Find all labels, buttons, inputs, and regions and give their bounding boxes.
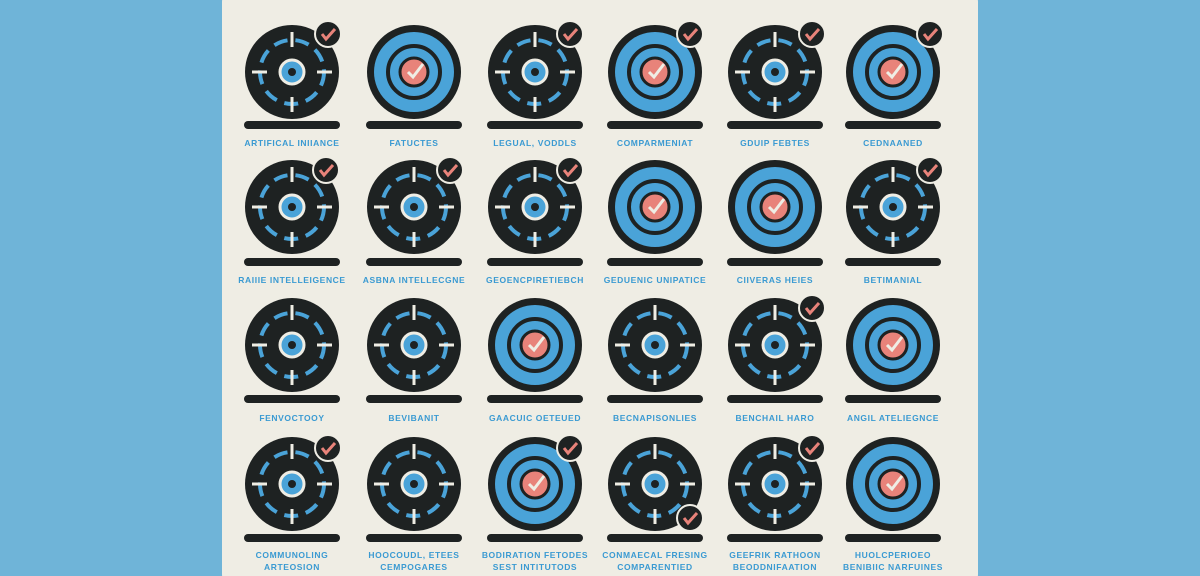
- row 1 labels: GDUIP FEBTES: [740, 138, 810, 148]
- row 2 labels: CIIVERAS HEIES: [737, 275, 813, 285]
- row 1 labels: ARTIFICAL INIIANCE: [244, 138, 340, 148]
- row 4 labels: BODIRATION FETODES: [482, 550, 588, 560]
- row 4 labels: COMMUNOLING: [256, 550, 328, 560]
- row 1 labels: FATUCTES: [389, 138, 439, 148]
- row 2 icons: [245, 157, 943, 254]
- row 3 bars: [244, 395, 941, 403]
- row 2 bars: [244, 258, 941, 266]
- row 4 labels: COMPARENTIED: [617, 562, 693, 572]
- row 3 labels: BENCHAIL HARO: [736, 413, 814, 423]
- row 2 labels: [238, 275, 922, 285]
- row 2 labels: GEOENCPIRETIEBCH: [486, 275, 584, 285]
- row 3 labels: BECNAPISONLIES: [613, 413, 697, 423]
- row 1 labels: COMPARMENIAT: [617, 138, 693, 148]
- row 3 labels: FENVOCTOOY: [259, 413, 325, 423]
- row 1 labels: LEGUAL, VODDLS: [493, 138, 577, 148]
- row 4 labels: BENIBIIC NARFUINES: [843, 562, 943, 572]
- row 4 labels: CONMAECAL FRESING: [602, 550, 708, 560]
- row 1 bars: [244, 121, 941, 129]
- row 4 labels: GEEFRIK RATHOON: [729, 550, 821, 560]
- row 4 labels: HUOLCPERIOEO: [855, 550, 931, 560]
- row 1 labels: [244, 138, 923, 148]
- row 2 labels: RAIIIE INTELLEIGENCE: [238, 275, 346, 285]
- row 1 icons: [245, 21, 943, 119]
- row 3 icons: [245, 295, 940, 392]
- panel: [222, 0, 978, 576]
- row 2 labels: ASBNA INTELLECGNE: [363, 275, 465, 285]
- row 4 icons: [245, 435, 940, 531]
- row 1 labels: CEDNAANED: [863, 138, 923, 148]
- row 4 bars: [244, 534, 941, 542]
- row 4 labels: CEMPOGARES: [380, 562, 448, 572]
- row 4 labels: ARTEOSION: [264, 562, 320, 572]
- row 3 labels: ANGIL ATELIEGNCE: [847, 413, 939, 423]
- row 4 labels: BEODDNIFAATION: [733, 562, 817, 572]
- row 2 labels: GEDUENIC UNIPATICE: [604, 275, 706, 285]
- row 3 labels: [259, 413, 939, 423]
- row 2 labels: BETIMANIAL: [864, 275, 922, 285]
- row 3 labels: BEVIBANIT: [388, 413, 440, 423]
- row 3 labels: GAACUIC OETEUED: [489, 413, 581, 423]
- row 4 labels: HOOCOUDL, ETEES: [368, 550, 460, 560]
- row 4 labels: SEST INTITUTODS: [493, 562, 577, 572]
- row 4 labels: [256, 550, 943, 572]
